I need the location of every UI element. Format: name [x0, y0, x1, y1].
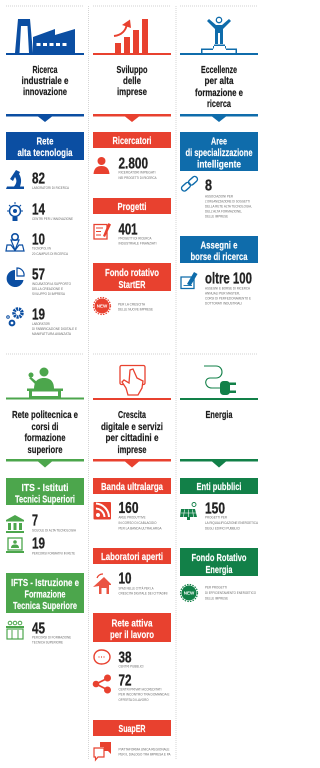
title: Ricerca	[32, 64, 58, 76]
stat: 7: 7	[32, 512, 38, 530]
icon: podium figure	[180, 17, 258, 55]
stat: 2.800: NEI PROGETTI DI RICERCA	[118, 175, 157, 180]
heading: aree di specializzazione intelligente	[180, 132, 258, 171]
stat: 19	[7, 306, 77, 336]
title: superiore	[28, 444, 63, 456]
stat: 19: LABORATORI	[32, 321, 50, 326]
stat: 8: 8	[205, 178, 212, 194]
stat: 8: DELLE IMPRESE	[205, 214, 228, 218]
heading: ifts: Tecnica Superiore	[13, 600, 77, 612]
stat: oltre 100: ANNUALI PER MASTER,	[205, 290, 240, 296]
stat: 10: 20 CAMPUS DI RICERCA	[32, 251, 68, 256]
heading: its: Tecnici Superiori	[15, 494, 75, 506]
stat: 10 laboratori: 10	[118, 570, 132, 588]
heading: fondo rotativo energia	[180, 548, 258, 576]
stat: 38: 38	[118, 650, 132, 666]
icon: teacher at desk	[6, 368, 84, 400]
divider with pointer	[6, 459, 84, 468]
stat: 72: OFFERTA DI LAVORO	[118, 697, 148, 702]
title: industriale e	[22, 75, 69, 87]
stat: 38: CENTRI PUBBLICI	[118, 664, 144, 668]
heading: ifts: Formazione	[24, 588, 66, 600]
heading: enti pubblici: Enti pubblici	[196, 481, 242, 493]
heading: laboratori aperti: Laboratori aperti	[101, 551, 163, 563]
stat: 7	[6, 512, 76, 533]
stat: suaper platform: PIATTAFORMA UNICA REGIONALE	[118, 746, 170, 752]
title: ricerca	[207, 98, 231, 110]
stat: 401: PROGETTI DI RICERCA	[118, 236, 152, 240]
heading: aree di specializzazione intelligente: Aree	[211, 136, 227, 148]
stat: 401	[94, 222, 156, 246]
stat: oltre 100	[181, 270, 252, 306]
heading: fondo rotativo energia: Energia	[206, 564, 233, 576]
title: digitale e servizi	[101, 421, 163, 433]
title: innovazione	[23, 86, 67, 98]
stat: 150: DEGLI EDIFICI PUBBLICI	[205, 526, 240, 530]
title: per alta	[204, 75, 234, 87]
stat: 45	[6, 620, 71, 644]
title: Eccellenze	[201, 64, 237, 76]
divider with pointer	[93, 114, 171, 122]
title: Crescita	[118, 409, 146, 421]
stat: 150: 150	[205, 500, 225, 518]
stat: new badge: DELLE NUOVE IMPRESE	[118, 306, 153, 312]
stat: 2.800	[94, 156, 157, 180]
stat: 72	[93, 672, 170, 702]
heading: ricercatori: Ricercatori	[112, 135, 152, 147]
stat: 14: CENTRI PER L'INNOVAZIONE	[32, 216, 73, 221]
stat: 10 laboratori: SPAZI NELLE CITTÀ PER LA	[118, 586, 154, 590]
panel: ricerca industriale e innovazione	[6, 19, 84, 336]
stat: 14	[7, 202, 73, 221]
stat: 2.800: RICERCATORI IMPIEGATI	[118, 170, 156, 174]
stat: new badge: PER LA CRESCITA	[118, 302, 145, 306]
heading: aree di specializzazione intelligente: intelligente	[197, 158, 241, 170]
heading: ifts	[6, 573, 84, 613]
stat: 19	[6, 536, 75, 556]
stat: oltre 100: DOTTORATI INDUSTRIALI	[205, 300, 242, 306]
title: corsi di	[32, 421, 59, 433]
stat: 19: MANIFATTURA AVANZATA	[32, 331, 71, 336]
title	[116, 64, 148, 98]
stat: 14: 14	[32, 202, 45, 218]
stat: 2.800: 2.800	[118, 156, 148, 172]
panel: energia	[180, 366, 258, 602]
stat: 401: INDUSTRIALE FINANZIATI	[118, 240, 156, 246]
stat: 57: DELLA CREAZIONE E	[32, 286, 63, 291]
stat: 72: CENTRI PRIVATI ACCREDITATI	[118, 686, 162, 692]
title: per cittadini e	[106, 432, 159, 444]
icon: plug	[180, 366, 258, 400]
heading: suaper	[93, 720, 171, 736]
title	[101, 409, 163, 456]
stat: 8: ASSOCIAZIONI PER	[205, 194, 233, 198]
panel: sviluppo delle imprese	[93, 19, 171, 314]
title: imprese	[117, 86, 147, 98]
heading: its	[6, 478, 84, 506]
heading: assegni e borse di ricerca	[180, 236, 258, 263]
stat: new badge energia: NEW	[184, 590, 195, 596]
stat: new badge energia: DELLE IMPRESE	[205, 596, 228, 600]
stat: 8: DELL'ALTA FORMAZIONE,	[205, 208, 242, 214]
stat: 57	[7, 266, 71, 296]
panel: crescita digitale e servizi per cittadini e imprese	[93, 366, 171, 760]
heading: ifts: IFTS - Istruzione e	[11, 577, 79, 589]
stat: 57: INCUBATORI A SUPPORTO	[32, 281, 71, 286]
title	[22, 64, 69, 98]
title: Sviluppo	[116, 64, 148, 76]
title: formazione e	[195, 87, 243, 99]
heading: rete alta tecnologia: Rete	[36, 136, 54, 148]
divider with pointer	[180, 459, 258, 468]
icon: factory	[6, 19, 84, 55]
heading: fondo rotativo starter: StartER	[118, 279, 146, 291]
title	[195, 64, 243, 110]
stat: 150: PROGETTI PER	[205, 514, 227, 520]
heading: rete alta tecnologia: alta tecnologia	[18, 147, 73, 159]
stat: 160	[94, 500, 162, 530]
stat: 160: IN CORSO DI CABLAGGIO	[118, 520, 156, 525]
heading: rete attiva per il lavoro: per il lavoro	[110, 629, 154, 641]
heading: assegni e borse di ricerca: Assegni e	[200, 240, 238, 252]
heading: its: ITS - Istituti	[22, 482, 69, 494]
title: Energia	[206, 409, 233, 421]
heading: fondo rotativo starter: Fondo rotativo	[105, 267, 159, 279]
stat: 57: 57	[32, 266, 45, 284]
title: imprese	[118, 444, 147, 456]
stat: 82	[6, 170, 69, 190]
stat: 82: 82	[32, 170, 45, 188]
stat: 82: LABORATORI DI RICERCA	[32, 185, 69, 190]
stat: 10: 10	[32, 232, 45, 248]
stat: new badge energia	[180, 584, 256, 602]
heading: rete attiva per il lavoro	[93, 613, 171, 642]
stat: 19: PERCORSI FORMATIVI IN RETE	[32, 550, 75, 556]
stat: 45: PERCORSI DI FORMAZIONE	[32, 634, 71, 640]
stat: oltre 100: ASSEGNI E BORSE DI RICERCA	[205, 286, 250, 290]
icon: rising bars	[93, 19, 171, 55]
stat: suaper platform: PER IL DIALOGO TRA IMPRESA E PA	[118, 752, 171, 756]
title: delle	[123, 75, 141, 87]
stat: 160: AREE PRODUTTIVE	[118, 514, 146, 520]
stat: 19: 19	[32, 536, 45, 552]
title: formazione	[24, 432, 66, 444]
stat: 45: 45	[32, 620, 45, 638]
heading: progetti: Progetti	[118, 201, 147, 213]
stat: 57: SVILUPPO DI IMPRESA	[32, 291, 65, 296]
divider with pointer	[180, 114, 258, 122]
heading: banda ultralarga: Banda ultralarga	[101, 481, 163, 493]
title	[12, 409, 78, 456]
stat: new badge	[94, 298, 153, 314]
heading: fondo rotativo starter	[93, 263, 171, 291]
heading: ricercatori	[93, 132, 171, 148]
heading: laboratori aperti	[93, 548, 171, 564]
heading: enti pubblici	[180, 478, 258, 494]
stat: 19: DI FABBRICAZIONE DIGITALE E	[32, 326, 77, 331]
stat: 72: 72	[118, 672, 132, 690]
stat: 38	[94, 650, 144, 668]
stat: 8	[180, 175, 252, 218]
stat: 7: SCUOLE DI ALTA TECNOLOGIA	[32, 528, 76, 532]
stat: 160: 160	[118, 500, 138, 517]
panel: rete politecnica e corsi di formazione superiore	[6, 368, 84, 644]
stat: new badge energia: PER PROGETTI	[205, 584, 227, 590]
heading: rete alta tecnologia	[6, 132, 84, 160]
stat: 150	[180, 500, 258, 530]
heading: suaper: SuapER	[118, 723, 146, 735]
panel: eccellenze per alta formazione e ricerca	[180, 17, 258, 306]
heading: progetti	[93, 198, 171, 214]
stat: 10	[6, 232, 68, 256]
icon: pointing hand	[93, 366, 171, 400]
stat: 72: PER INCONTRO TRA DOMANDA E	[118, 692, 170, 696]
stat: suaper platform	[94, 742, 171, 760]
stat: 45: TECNICA SUPERIORE	[32, 640, 63, 644]
stat: 10: TECNOPOLI IN	[32, 246, 51, 250]
stat: 160: PER LA BANDA ULTRALARGA	[118, 526, 162, 530]
stat: 19: 19	[32, 306, 45, 324]
stat: 10 laboratori: CRESCITA DIGITALE DEI CITTADINI	[118, 590, 168, 596]
divider with pointer	[6, 114, 84, 122]
stat: new badge: NEW	[97, 304, 108, 308]
title: Rete politecnica e	[12, 409, 78, 421]
stat: 10 laboratori	[93, 570, 168, 596]
heading: rete attiva per il lavoro: Rete attiva	[112, 618, 153, 630]
divider with pointer	[93, 459, 171, 468]
heading: banda ultralarga	[93, 478, 171, 494]
stat: 401: 401	[118, 222, 138, 238]
